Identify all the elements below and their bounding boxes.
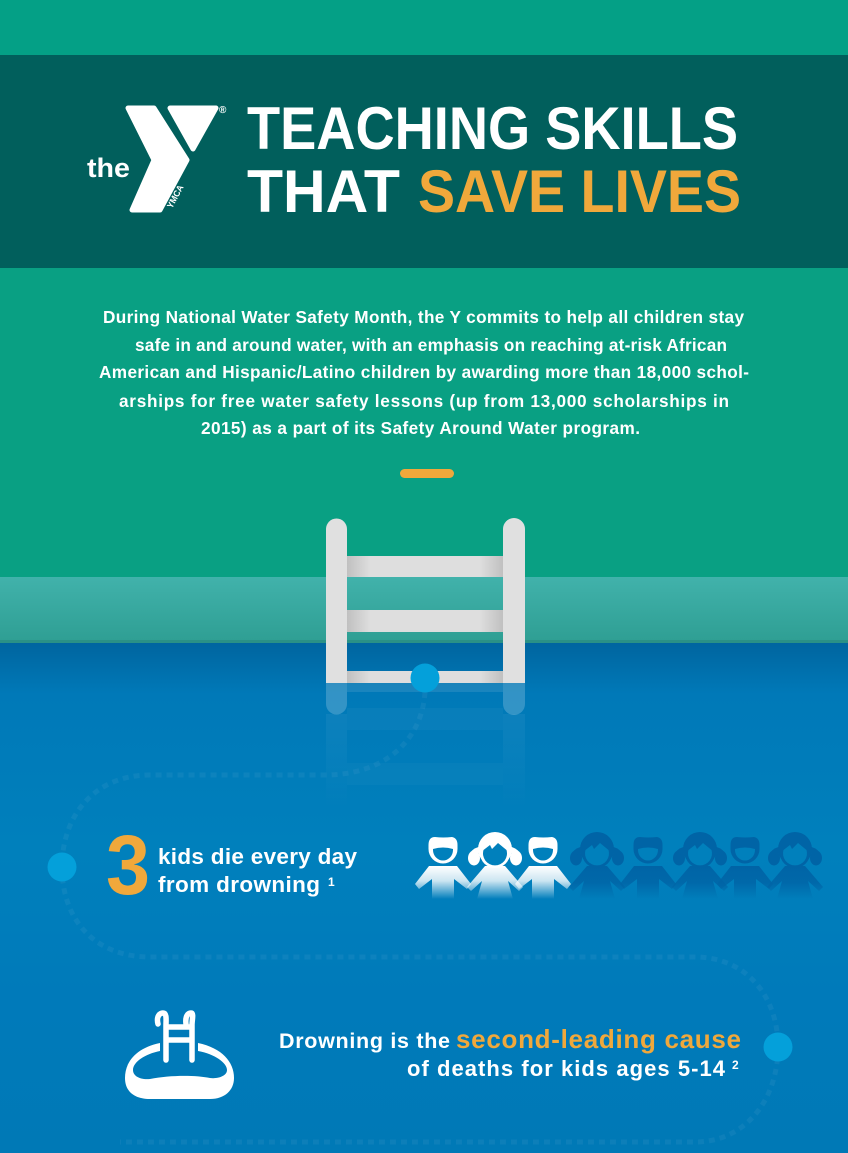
background: green intro area [0,268,848,577]
title: SAVE LIVES [418,158,741,225]
logo: the Y YMCA [87,105,227,210]
title [247,95,741,225]
orange divider pill [400,469,454,478]
header band [0,55,848,268]
icon: swimming pool with ladder [125,1013,234,1099]
dotted path [62,692,778,1142]
intro paragraph: During National Water Safety Month, the Y commits to help all children stay [103,307,744,327]
stat: 3 kids die every day: 3 [106,818,150,912]
intro paragraph: safe in and around water, with an emphasis on reaching at-risk African [135,335,727,355]
ladder [326,518,525,683]
stat: second-leading cause: of deaths for kids ages 5-14 [407,1056,726,1081]
title: THAT [247,158,400,225]
intro paragraph: 2015) as a part of its Safety Around Water program. [201,418,640,438]
stat: second-leading cause: second-leading cause [456,1024,741,1054]
stat: 3 kids die every day: from drowning [158,872,320,897]
intro paragraph: American and Hispanic/Latino children by awarding more than 18,000 schol- [99,362,749,382]
logo: the Y YMCA: the [87,153,130,183]
child 4 [569,832,625,899]
stat: second-leading cause [279,1024,741,1081]
child 1 highlighted [415,837,471,899]
stat: 3 kids die every day [106,818,357,912]
pool edge [0,577,848,640]
pictogram: eight children holding hands, three highlighted [415,832,823,899]
ladder reflection [326,683,525,810]
stat: second-leading cause: Drowning is the [279,1029,450,1053]
logo: the Y YMCA: ® [219,105,227,116]
path marker: left [48,852,76,882]
title: TEACHING SKILLS [247,95,738,162]
stat: second-leading cause: 2 [732,1058,739,1072]
child 3 highlighted [515,837,571,899]
intro paragraph: arships for free water safety lessons (up from 13,000 scholarships in [119,391,729,411]
child 7 [717,837,773,899]
path marker: ladder [410,664,440,692]
child 8 [767,832,823,899]
intro paragraph [99,307,749,438]
stat: 3 kids die every day: kids die every day [158,844,357,869]
path marker: right [764,1032,792,1062]
child 2 highlighted [467,832,523,899]
stat: 3 kids die every day: 1 [328,875,335,889]
child 5 [620,837,676,899]
background: top green band [0,0,848,55]
pool water [0,640,848,1153]
logo: the Y YMCA: YMCA [165,183,186,210]
child 6 [672,832,728,899]
